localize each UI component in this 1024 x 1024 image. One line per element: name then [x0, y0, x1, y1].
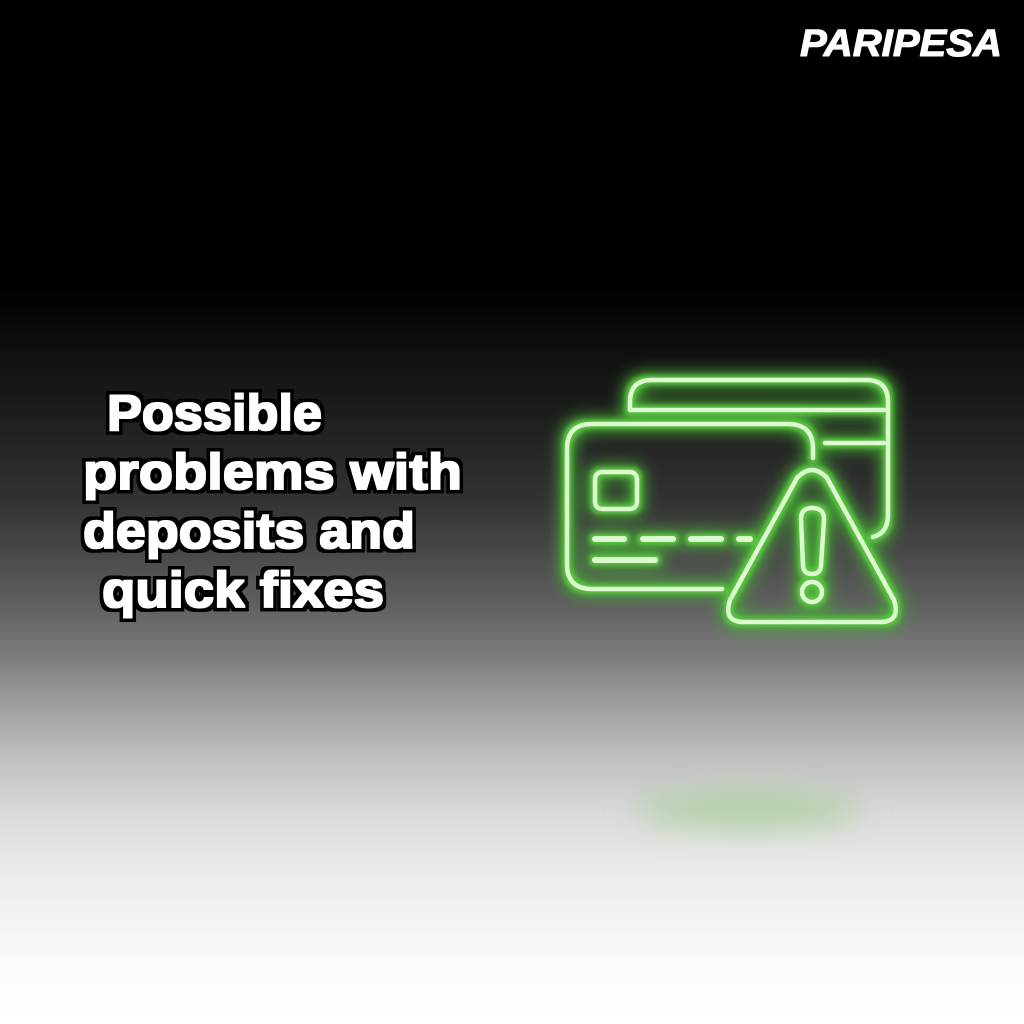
reflected green glow on floor [633, 796, 863, 824]
logo: PARIPESA: PARIPESA [800, 23, 1002, 65]
card number dashes [595, 539, 750, 560]
warning triangle [728, 470, 896, 622]
front card [567, 424, 813, 589]
title line 3: deposits and [83, 503, 415, 559]
icon: neon credit cards with warning triangle [567, 380, 896, 622]
exclamation mark [801, 508, 824, 602]
back card [630, 380, 888, 537]
title line 2: problems with [83, 444, 462, 500]
card chip [595, 472, 637, 509]
title: possible problems with deposits and quick fixes [83, 385, 462, 618]
title line 1: Possible [107, 385, 322, 441]
title line 4: quick fixes [102, 562, 384, 618]
